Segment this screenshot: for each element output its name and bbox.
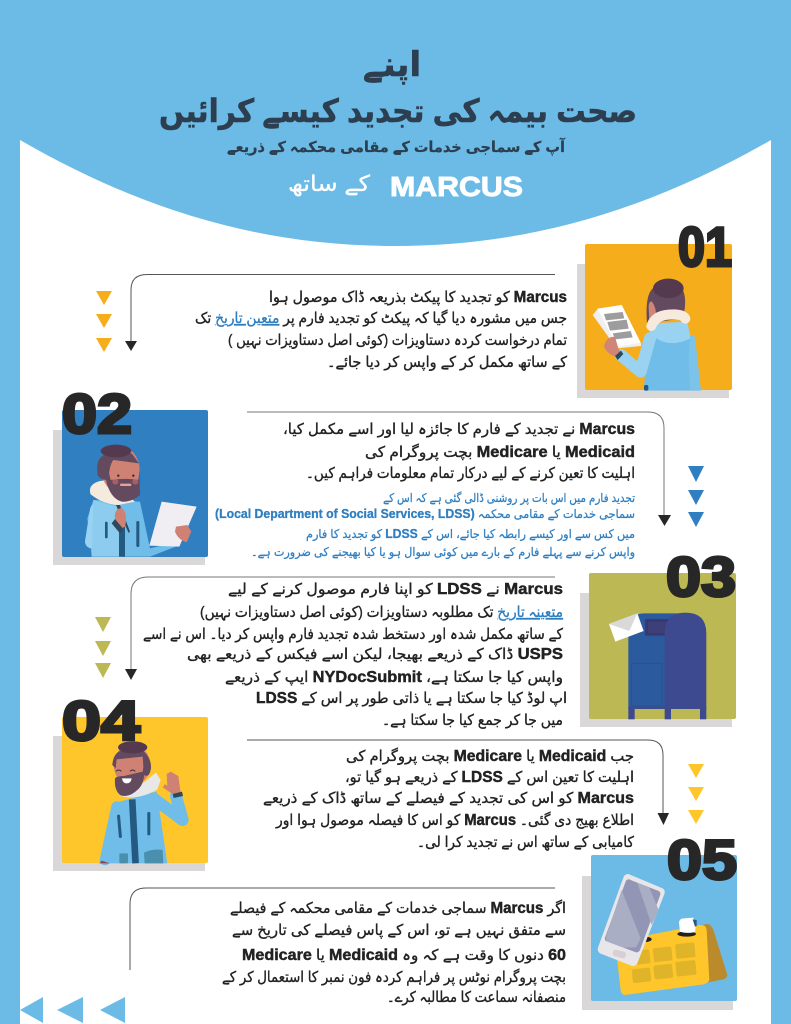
panel: step 05 text: بچت پروگرام نوٹس پر فراہم کردہ فون نمبر کا استعمال کر کے — [222, 968, 566, 987]
panel: step 04 text: جب Medicaid یا Medicare بچت پروگرام کی — [346, 747, 634, 766]
panel: step 04 illustration — [53, 689, 208, 871]
panel: step 05 text: منصفانہ سماعت کا مطالبہ کرے۔ — [387, 989, 566, 1006]
panel: step 05 text: سے متفق نہیں ہے تو، اس کے پاس فیصلے کی تاریخ سے — [232, 922, 566, 940]
number 03: 03 — [666, 545, 736, 608]
panel: step 02 text: واپس کرنے سے پہلے فارم کے بارے میں کوئی سوال ہو یا کیا بھیجنے کی ضرورت ہے۔ — [251, 545, 635, 560]
panel: step 03 text: واپس کیا جا سکتا ہے، NYDocSubmit ایپ کے ذریعے — [225, 669, 563, 687]
panel: step 01 text: Marcus کو تجدید کا پیکٹ بذریعہ ڈاک موصول ہوا — [269, 289, 567, 307]
panel: step 03 text: متعینہ تاریخ تک مطلوبہ دستاویزات (کوئی اصل دستاویزات نہیں) — [200, 604, 563, 621]
panel: step 01 text — [96, 274, 568, 372]
panel: step 05 illustration — [582, 828, 737, 1010]
panel: step 01 text: تمام درخواست کردہ دستاویزات (کوئی اصل دستاویزات نہیں ) — [228, 332, 567, 349]
title block: صحت بیمہ کی تجدید کیسے کرائیں — [159, 93, 637, 130]
panel: step 02 text: سماجی خدمات کے مقامی محکمہ (Local Department of Social Services, LDSS) — [215, 506, 635, 521]
panel: step 04 text: کامیابی کے ساتھ اس نے تجدید کرا لی۔ — [417, 834, 635, 851]
panel: step 04 text — [247, 740, 704, 851]
panel: step 02 text: میں کس سے اور کیسے رابطہ کیا جائے، اس کے LDSS کو تجدید کا فارم — [306, 526, 635, 542]
panel: step 03 text: اپ لوڈ کیا جا سکتا ہے یا ذاتی طور پر اس کے LDSS — [256, 690, 567, 708]
number 01: 01 — [678, 215, 732, 278]
panel: step 03 text: Marcus نے LDSS کو اپنا فارم موصول کرنے کے لیے — [228, 581, 563, 599]
title block — [159, 46, 637, 202]
panel: step 05 text: اگر Marcus سماجی خدمات کے مقامی محکمہ کے فیصلے — [230, 899, 566, 917]
panel: step 02 text: Medicaid یا Medicare بچت پروگرام کی — [365, 443, 635, 462]
panel: step 02 text: Marcus نے تجدید کے فارم کا جائزہ لیا اور اسے مکمل کیا، — [283, 421, 635, 438]
number 04: 04 — [62, 689, 140, 752]
panel: step 01 text: کے ساتھ مکمل کر کے واپس کر دیا جائے۔ — [327, 354, 568, 372]
panel: step 02 illustration — [53, 382, 208, 565]
number 05: 05 — [667, 828, 737, 891]
title block: آپ کے سماجی خدمات کے مقامی محکمہ کے ذریعے — [227, 138, 566, 156]
panel: step 03 illustration — [580, 545, 736, 727]
panel: step 02 text: اہلیت کا تعین کرنے کے لیے درکار تمام معلومات فراہم کیں۔ — [306, 465, 635, 482]
panel: step 03 text: کے ساتھ مکمل شدہ اور دستخط شدہ تجدید فارم واپس کر دیا۔ اس نے اسے — [143, 626, 564, 644]
panel: step 03 text — [95, 577, 567, 729]
footer arrows — [20, 997, 125, 1023]
panel: step 05 text: 60 دنوں کا وقت ہے کہ وہ Medicaid یا Medicare — [242, 947, 566, 964]
panel: step 01 illustration — [577, 215, 732, 398]
panel: step 03 text: میں جا کر جمع کیا جا سکتا ہے۔ — [382, 712, 563, 729]
panel: step 05 text — [130, 888, 566, 1006]
number 02: 02 — [62, 382, 132, 445]
panel: step 01 text: جس میں مشورہ دیا گیا کہ پیکٹ کو تجدید فارم پر متعین تاریخ تک — [195, 309, 567, 328]
panel: step 02 text — [215, 412, 704, 560]
title block: کے ساتھ — [288, 171, 371, 196]
panel: step 04 text: اہلیت کا تعین اس کے LDSS کے ذریعے ہو گیا تو، — [345, 768, 634, 786]
title block: اپنے — [363, 46, 421, 85]
title block: MARCUS — [390, 171, 523, 202]
panel: step 04 text: Marcus کو اس کی تجدید کے فیصلے کے ساتھ ڈاک کے ذریعے — [263, 790, 634, 807]
panel: step 02 text: تجدید فارم میں اس بات پر روشنی ڈالی گئی ہے کہ اس کے — [383, 491, 635, 506]
panel: step 04 text: اطلاع بھیج دی گئی۔ Marcus کو اس کا فیصلہ موصول ہوا اور — [275, 811, 634, 829]
panel: step 03 text: USPS ڈاک کے ذریعے بھیجا، لیکن اسے فیکس کے ذریعے بھی — [187, 646, 563, 663]
